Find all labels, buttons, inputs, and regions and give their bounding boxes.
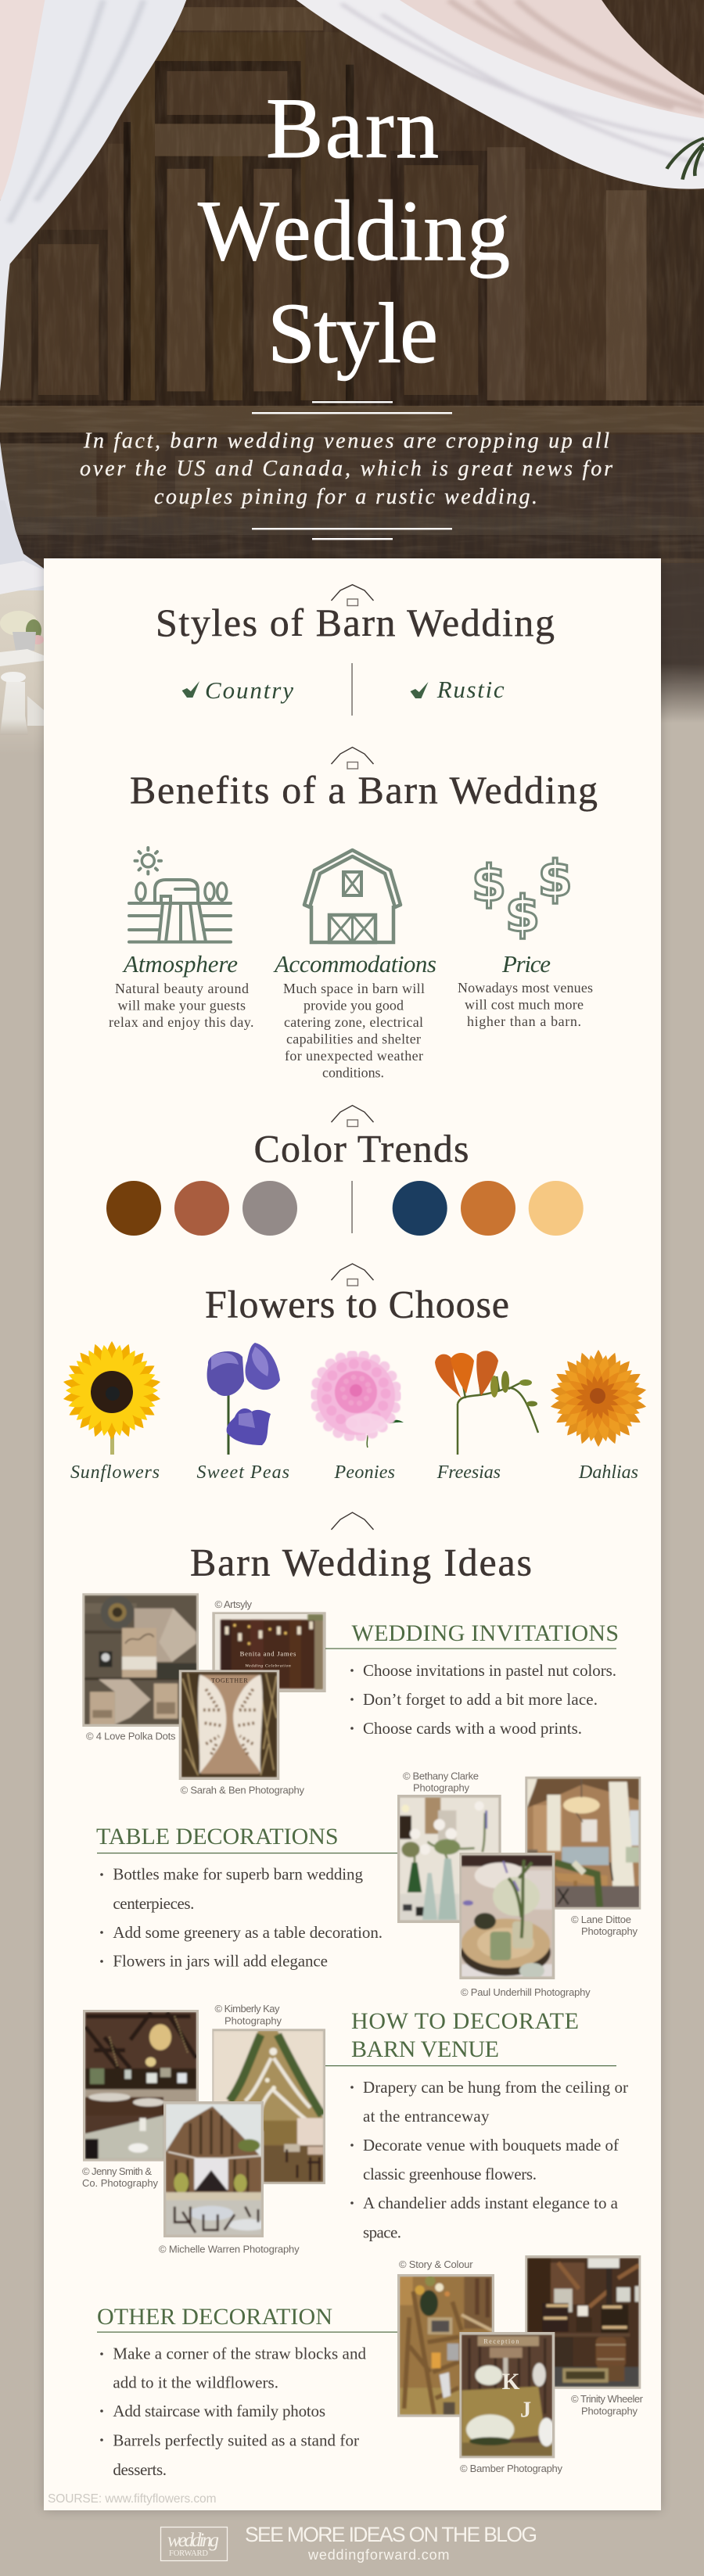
benefit: price: Price (501, 950, 551, 978)
title: Barn (266, 81, 439, 176)
bullet list: at the entranceway (363, 2107, 490, 2126)
title: Style (268, 285, 438, 381)
title rules top (252, 401, 452, 414)
benefit: accommodations: conditions. (322, 1065, 384, 1081)
caption: Photography (581, 2406, 638, 2417)
caption: © Kimberly Kay (214, 2003, 280, 2015)
left table vignette (0, 500, 44, 755)
call to action: SEE MORE IDEAS ON THE BLOG (245, 2523, 537, 2546)
divider (351, 1181, 353, 1233)
benefit: atmosphere: relax and enjoy this day. (109, 1014, 253, 1030)
benefit: atmosphere: will make your guests (117, 998, 246, 1014)
footer (161, 2523, 537, 2563)
icon: barn roof (332, 1512, 374, 1530)
logo: wedding forward: FORWARD (169, 2549, 208, 2558)
flower labels: Freesias (436, 1462, 501, 1483)
heading: Benefits of a Barn Wedding (130, 768, 598, 812)
caption (82, 2165, 158, 2189)
caption: Photography (581, 1925, 638, 1937)
photo: draped ceiling with garland (212, 2029, 325, 2184)
swatches (106, 1181, 584, 1236)
section: flowers to choose (58, 1264, 649, 1483)
bullet list: Flowers in jars will add elegance (113, 1952, 328, 1971)
idea: table decorations text (96, 1824, 398, 1971)
icon: barn roof (332, 1264, 374, 1286)
flower labels: Sunflowers (70, 1462, 160, 1483)
bullet list: Choose invitations in pastel nut colors. (363, 1661, 616, 1680)
idea photos: table decorations (397, 1777, 641, 1979)
photo: ladder with photos (397, 2274, 494, 2417)
idea photos: wedding invitations (82, 1593, 326, 1780)
subheading (351, 2008, 579, 2062)
drapes (0, 0, 704, 563)
logo: wedding forward (161, 2528, 227, 2560)
bullet list: Add some greenery as a table decoration. (113, 1923, 383, 1942)
benefit: atmosphere (109, 950, 253, 1030)
photo: candlelit barn dining (83, 2010, 199, 2162)
icon: dollars: $ (537, 851, 573, 909)
title (198, 81, 510, 381)
icon: barn roof (332, 748, 374, 769)
section: color trends (106, 1106, 584, 1236)
caption: © Jenny Smith & (82, 2165, 152, 2177)
heading: Flowers to Choose (205, 1283, 509, 1326)
intro text: couples pining for a rustic wedding. (154, 485, 537, 509)
idea: wedding invitations text (325, 1620, 619, 1738)
intro text: In fact, barn wedding venues are cropping up all (83, 429, 609, 454)
heading: Barn Wedding Ideas (190, 1541, 532, 1584)
benefit: accommodations (273, 950, 436, 1081)
card shadow (44, 558, 661, 2510)
bullet list: classic greenhouse flowers. (363, 2165, 537, 2183)
photo: wood print card (212, 1612, 326, 1692)
photo: kraft invitations (82, 1593, 199, 1727)
photo: hay bale reception sign: K (502, 2370, 520, 2395)
idea photos: decorate barn venue (83, 2010, 325, 2237)
photo: hay bale reception sign: Reception (483, 2338, 519, 2345)
flower labels: Dahlias (578, 1462, 638, 1483)
flower labels: Sweet Peas (197, 1462, 289, 1483)
bullet list: Barrels perfectly suited as a stand for (113, 2431, 359, 2449)
flower labels (70, 1462, 638, 1483)
caption: Photography (224, 2015, 282, 2027)
icon: farm (129, 848, 231, 942)
photo: wood print card: Benita and James (240, 1649, 296, 1657)
flower: peony (315, 1355, 404, 1448)
icon: dollars: $ (472, 856, 506, 913)
bullet list: Don’t forget to add a bit more lace. (363, 1690, 598, 1709)
hero: wooden barn door photo with drapes (0, 0, 704, 755)
caption: © Trinity Wheeler (571, 2393, 644, 2405)
caption: © Sarah & Ben Photography (181, 1785, 305, 1796)
idea: other decoration text (97, 2304, 397, 2479)
section: styles of barn wedding (156, 585, 555, 716)
benefit: accommodations: capabilities and shelter (286, 1031, 421, 1046)
style: rustic: Rustic (436, 676, 505, 703)
bullet list: Bottles make for superb barn wedding (113, 1865, 363, 1884)
bullet list: Add staircase with family photos (113, 2402, 325, 2420)
bullet list (100, 2345, 366, 2479)
benefit: price: Nowadays most venues (458, 980, 593, 996)
source note: SOURSE: www.fiftyflowers.com (48, 2492, 216, 2506)
caption: © Story & Colour (399, 2258, 473, 2270)
photo: hay bale reception sign (459, 2332, 555, 2458)
heading: Color Trends (253, 1127, 469, 1171)
photo: lace invitation on straw: TOGETHER (211, 1677, 248, 1684)
icon: barn (304, 850, 400, 942)
benefit: price: higher than a barn. (467, 1014, 581, 1029)
subheading: OTHER DECORATION (97, 2304, 332, 2330)
title rules bottom (252, 528, 452, 540)
style: country: Country (205, 676, 293, 704)
idea photos: other decoration (397, 2255, 641, 2458)
subheading: WEDDING INVITATIONS (352, 1620, 619, 1646)
logo: wedding forward: wedding (167, 2530, 219, 2551)
subheading: HOW TO DECORATE (351, 2008, 579, 2034)
title: Wedding (198, 183, 510, 278)
photo: hay bale reception sign: J (520, 2398, 531, 2423)
flower: sweet peas (207, 1343, 280, 1455)
benefit: accommodations: Accommodations (273, 950, 436, 978)
intro text: over the US and Canada, which is great news for (80, 457, 612, 481)
intro text (80, 429, 612, 509)
benefit: atmosphere: Atmosphere (122, 950, 238, 978)
bullet list (350, 2078, 628, 2241)
caption (403, 1771, 479, 1794)
photo: lace invitation on straw (179, 1670, 279, 1780)
caption (571, 2393, 644, 2417)
bullet list: desserts. (113, 2460, 167, 2479)
icon: dollars (472, 851, 573, 944)
benefit: accommodations: for unexpected weather (285, 1048, 423, 1064)
benefit: atmosphere: Natural beauty around (115, 981, 249, 996)
flower: sunflower (58, 1337, 166, 1455)
photo: chandelier hall (525, 1777, 641, 1910)
caption: Photography (413, 1782, 469, 1794)
panel: main content card (44, 558, 661, 2510)
bullet list: Decorate venue with bouquets made of (363, 2136, 619, 2154)
caption: © Bethany Clarke (403, 1771, 479, 1781)
rule (97, 2332, 397, 2333)
heading: Styles of Barn Wedding (156, 601, 555, 644)
photo: wood print card: Wedding Celebration (245, 1664, 291, 1669)
bullet list: Make a corner of the straw blocks and (113, 2345, 366, 2363)
caption: Co. Photography (82, 2177, 158, 2189)
subheading: BARN VENUE (351, 2036, 499, 2062)
photo: barrel dessert table (525, 2255, 641, 2389)
icon: dollars: $ (505, 886, 540, 944)
section: benefits of a barn wedding (109, 748, 598, 1081)
website: weddingforward.com (307, 2547, 449, 2563)
caption: © Lane Dittoe (571, 1914, 631, 1925)
caption (214, 2003, 282, 2027)
bullet list: centerpieces. (113, 1894, 194, 1913)
bullet list: space. (363, 2223, 401, 2241)
bullet list: A chandelier adds instant elegance to a (363, 2194, 619, 2212)
benefit: accommodations: catering zone, electrical (284, 1014, 423, 1030)
bullet list (350, 1661, 616, 1738)
photo: rustic barn exterior (163, 2101, 268, 2237)
icon: barn roof (332, 585, 374, 605)
caption: © Bamber Photography (460, 2463, 563, 2474)
bullet list: add to it the wildflowers. (113, 2373, 278, 2391)
caption (571, 1914, 638, 1937)
photo: bottle bouquets (397, 1795, 501, 1923)
caption: © Artsyly (214, 1598, 252, 1610)
caption: © 4 Love Polka Dots (86, 1730, 176, 1742)
subheading: TABLE DECORATIONS (96, 1824, 339, 1849)
bullet list: Drapery can be hung from the ceiling or (363, 2078, 628, 2097)
benefit: price: will cost much more (465, 996, 584, 1012)
benefit: accommodations: Much space in barn will (283, 981, 425, 996)
benefit: price (458, 950, 593, 1029)
idea: how to decorate barn venue text (325, 2008, 628, 2241)
flower labels: Peonies (333, 1462, 395, 1483)
benefit: accommodations: provide you good (304, 998, 404, 1014)
divider (351, 663, 353, 716)
photo: centerpiece on wood slice (459, 1853, 555, 1979)
caption: © Michelle Warren Photography (159, 2244, 300, 2255)
flower: freesia (435, 1351, 538, 1455)
icon: barn roof (332, 1106, 374, 1126)
section: barn wedding ideas heading (190, 1512, 532, 1584)
bullet list (100, 1865, 383, 1971)
rule (325, 2065, 616, 2066)
caption: © Paul Underhill Photography (461, 1986, 591, 1998)
flower: dahlia (548, 1347, 649, 1449)
bullet list: Choose cards with a wood prints. (363, 1719, 582, 1738)
